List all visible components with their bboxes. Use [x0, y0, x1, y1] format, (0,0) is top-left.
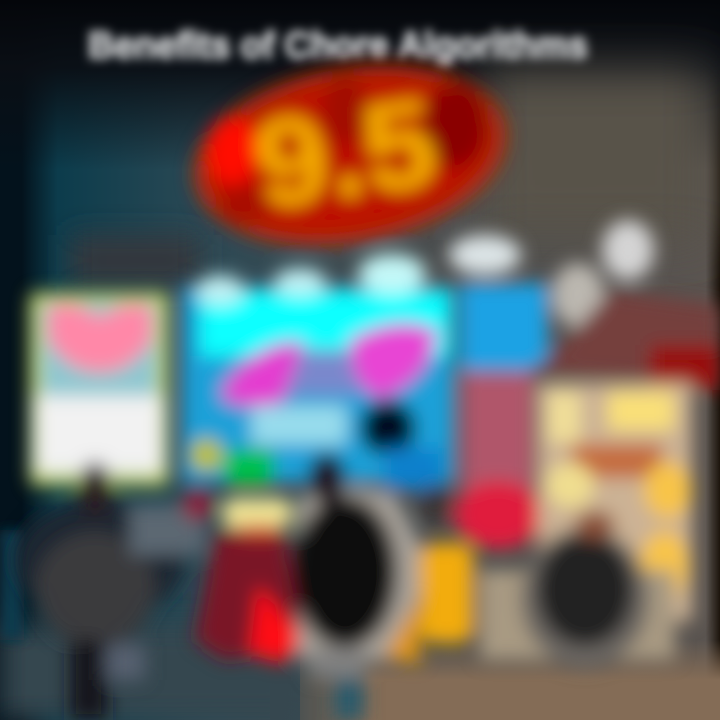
- figure: red person: [182, 489, 304, 664]
- panel: left card: [30, 293, 168, 485]
- badge: red ellipse with score: [179, 41, 521, 269]
- figure: grey surround and black circle: [293, 453, 428, 678]
- pink shapes: [285, 350, 360, 394]
- green chip: [190, 439, 222, 471]
- figure: yellow person: [384, 485, 474, 664]
- badge score text: 9.5: [247, 73, 444, 235]
- figure: left dark person: [15, 462, 205, 720]
- figure: right grey ring with black circle: [480, 511, 675, 668]
- light label: [252, 406, 346, 444]
- floor details: [70, 672, 364, 720]
- card heart shape: [48, 304, 152, 372]
- panel: right shelf with warm lights: [530, 290, 720, 621]
- figures group: [15, 453, 675, 720]
- panel: central blue screen: [182, 254, 454, 490]
- panel: right blue tab: [449, 220, 654, 371]
- title: Benefits of Chore Algorithms: [88, 25, 588, 67]
- panel: red-pink column: [454, 372, 542, 549]
- dark circle: [360, 400, 416, 456]
